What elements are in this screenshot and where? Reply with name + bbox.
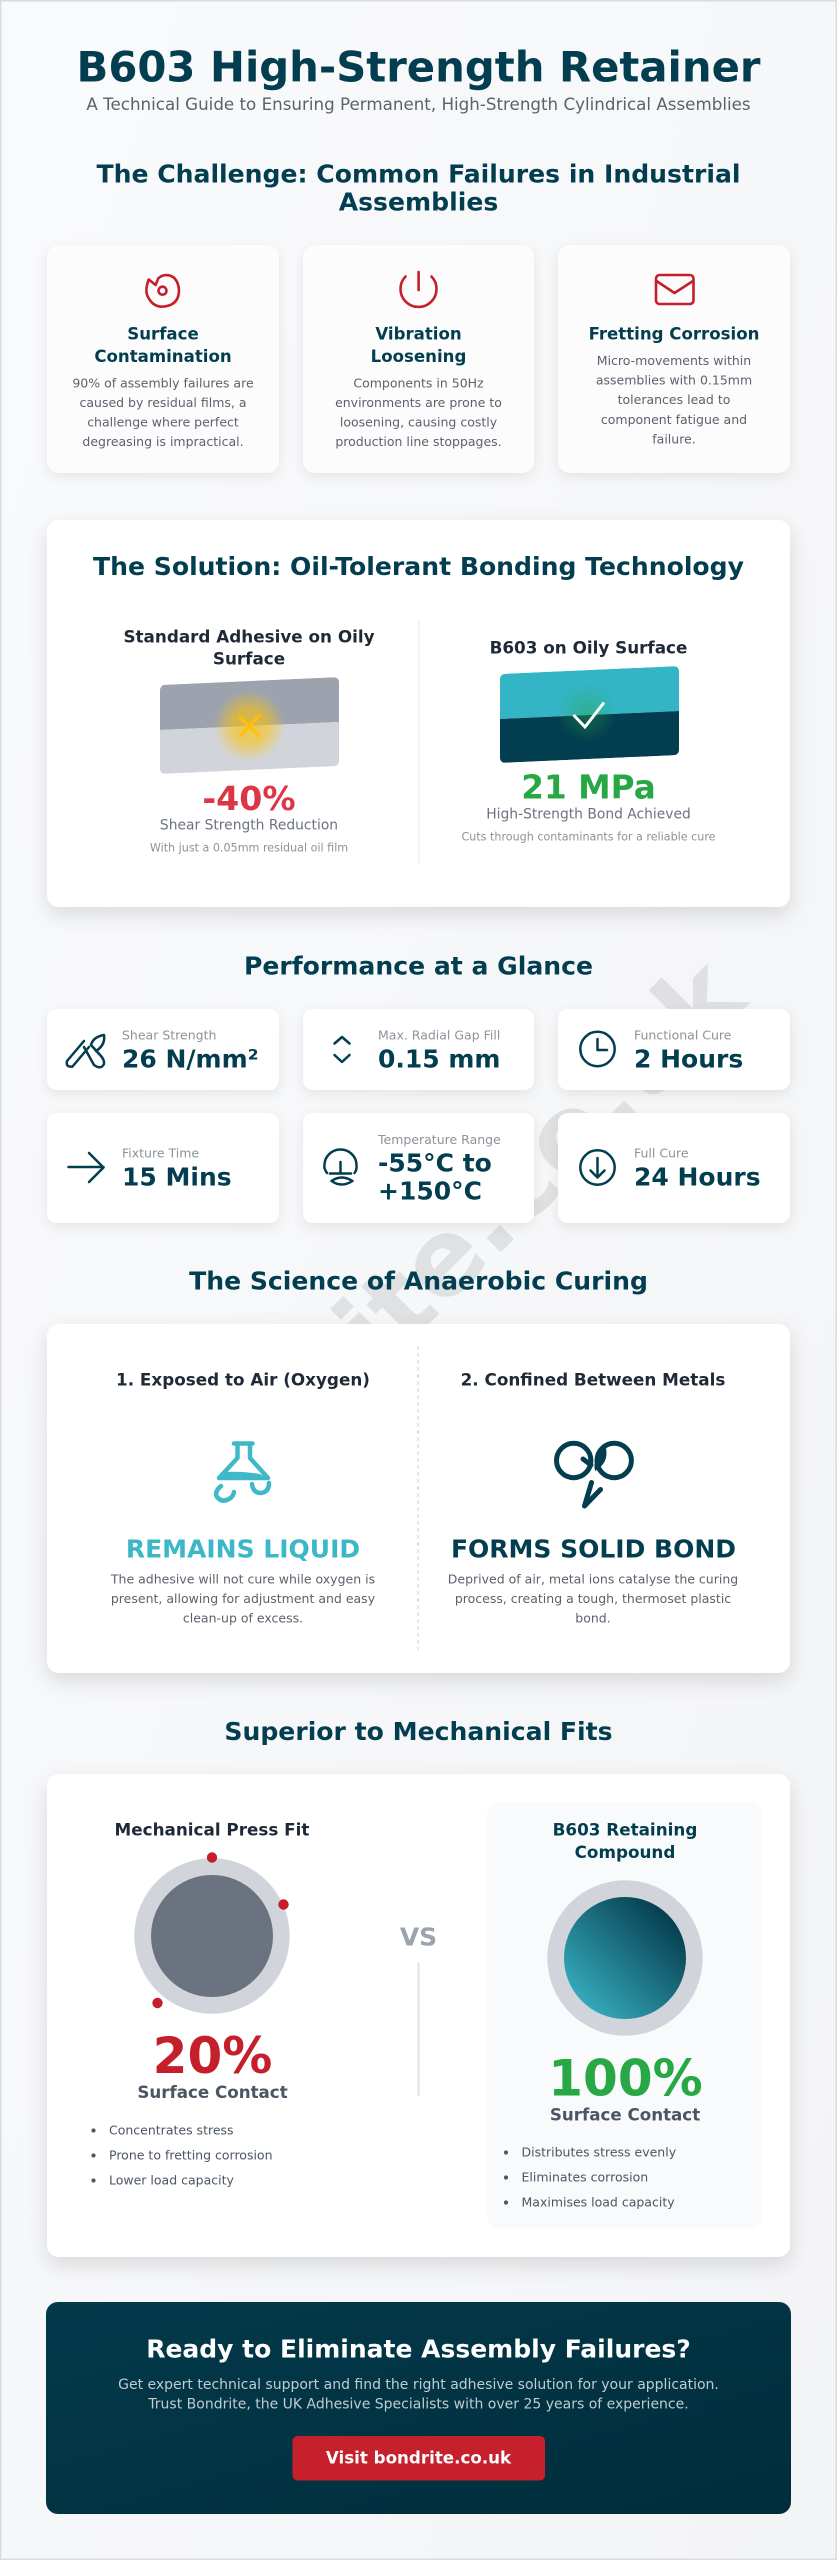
label and value (634, 1027, 743, 1073)
b603 column (487, 1802, 762, 2228)
stat card: functional cure (558, 1009, 790, 1090)
icon: clock (580, 1032, 615, 1066)
heading: the science: The Science of Anaerobic Curing (189, 1266, 648, 1295)
step text (110, 1571, 376, 1626)
stat label: Surface Contact (137, 2082, 288, 2102)
stat label: High-Strength Bond Achieved (486, 806, 691, 822)
bullet list: Maximises load capacity (522, 2195, 675, 2210)
card title: Loosening (371, 347, 466, 366)
step 2 column (448, 1369, 738, 1626)
label and value (378, 1027, 500, 1073)
stat label: Surface Contact (550, 2105, 700, 2125)
stat card: temperature range (303, 1113, 534, 1223)
bullet list (91, 2122, 273, 2188)
failed bond diagram (160, 677, 339, 774)
label and value: 15 Mins (122, 1162, 232, 1191)
step text (448, 1571, 738, 1626)
label and value: 26 N/mm² (122, 1044, 259, 1073)
column title (123, 627, 375, 668)
icon: temperature (324, 1149, 357, 1184)
label and value (122, 1146, 232, 1191)
stat: 21 MPa: 21 MPa (521, 768, 656, 806)
icon: down arrow (580, 1150, 615, 1185)
card title: Vibration (375, 324, 462, 343)
diagram: press fit circles (134, 1852, 290, 2014)
card title (371, 324, 466, 366)
card text: component fatigue and (601, 412, 747, 427)
column title (553, 1820, 697, 1862)
step 1 column (110, 1369, 376, 1626)
panel: vibration loosening (303, 245, 534, 473)
stat card: fixture time (47, 1113, 279, 1223)
call to action panel (46, 2302, 791, 2514)
label and value: 0.15 mm (378, 1044, 500, 1073)
heading: the solution: The Solution: Oil-Tolerant Bonding Technology (93, 552, 744, 581)
heading: superior: Superior to Mechanical Fits (224, 1717, 613, 1746)
stat label: Shear Strength Reduction (160, 817, 338, 833)
icon: envelope (656, 275, 694, 304)
column title: Surface (213, 648, 285, 668)
card text: loosening, causing costly (340, 415, 498, 430)
step title: 1. Exposed to Air (Oxygen) (116, 1369, 370, 1389)
diagram: b603 circles (547, 1880, 703, 2036)
column title: Compound (575, 1842, 675, 1862)
column title: B603 Retaining (553, 1820, 697, 1840)
mechanical press fit column (91, 1820, 309, 2188)
bullet list: Distributes stress evenly (522, 2144, 677, 2159)
step text: Deprived of air, metal ions catalyse the curing (448, 1571, 738, 1586)
strong bond diagram (500, 666, 679, 763)
column title: Mechanical Press Fit (115, 1820, 309, 1840)
card text: 90% of assembly failures are (72, 376, 254, 390)
card text: Components in 50Hz (353, 376, 484, 390)
label and value: Shear Strength (122, 1027, 216, 1042)
standard adhesive column (123, 627, 375, 855)
icon: flask (216, 1444, 269, 1501)
heading: the challenge: The Challenge: Common Failures in Industrial (96, 160, 740, 189)
icon: bonded rings (556, 1443, 631, 1506)
label and value: -55°C to (378, 1149, 492, 1178)
bullet list: Lower load capacity (109, 2172, 234, 2188)
heading: performance: Performance at a Glance (244, 951, 593, 980)
label and value: 24 Hours (634, 1162, 761, 1191)
title: B603 High-Strength Retainer (77, 43, 761, 92)
label and value: +150°C (378, 1176, 482, 1205)
card text: Micro-movements within (597, 353, 751, 368)
step text: present, allowing for adjustment and easy (111, 1591, 376, 1606)
heading: the challenge: Assemblies (339, 188, 498, 217)
step text: clean-up of excess. (183, 1610, 303, 1626)
cta text (118, 2377, 719, 2413)
bullet list: Prone to fretting corrosion (109, 2147, 273, 2162)
stat: 20%: 20% (153, 2027, 272, 2085)
stat card: shear strength (47, 1009, 279, 1090)
label and value: Max. Radial Gap Fill (378, 1027, 500, 1042)
b603 column (461, 637, 716, 844)
card text: environments are prone to (335, 395, 502, 410)
card text: assemblies with 0.15mm (596, 373, 752, 388)
card text: failure. (652, 431, 696, 446)
stat note: With just a 0.05mm residual oil film (150, 842, 348, 855)
label and value (122, 1027, 259, 1073)
stat: -40%: -40% (202, 779, 296, 818)
card text: challenge where perfect (87, 415, 239, 430)
stat card: full cure (558, 1113, 790, 1223)
bullet list (504, 2144, 677, 2210)
vs divider: VS (400, 1923, 437, 1952)
card text: degreasing is impractical. (82, 434, 244, 449)
card title: Fretting Corrosion (589, 324, 759, 343)
state: forms solid bond: FORMS SOLID BOND (451, 1535, 736, 1564)
label and value: Temperature Range (377, 1132, 501, 1147)
icon: power (400, 272, 436, 307)
icon: target (146, 275, 179, 307)
label and value: Functional Cure (634, 1027, 732, 1042)
card title: Surface (127, 324, 199, 343)
step text: process, creating a tough, thermoset plastic (455, 1591, 731, 1606)
button (292, 2436, 545, 2480)
subtitle: A Technical Guide to Ensuring Permanent, High-Strength Cylindrical Assemblies (86, 94, 751, 114)
card text (72, 376, 254, 449)
cta text: Get expert technical support and find the right adhesive solution for your application. (118, 2377, 719, 2393)
card title: Contamination (94, 347, 232, 366)
icon: tools (67, 1035, 104, 1067)
label and value (634, 1146, 761, 1191)
label and value: Fixture Time (122, 1146, 199, 1161)
bullet list: Concentrates stress (109, 2122, 234, 2137)
cta heading: Ready to Eliminate Assembly Failures? (146, 2334, 691, 2363)
state: remains liquid: REMAINS LIQUID (126, 1535, 360, 1564)
card text (596, 353, 752, 446)
card text: production line stoppages. (335, 434, 502, 449)
stat card: radial gap fill (303, 1009, 534, 1090)
column title: Standard Adhesive on Oily (123, 627, 375, 647)
panel: fretting corrosion (558, 245, 790, 473)
card title (94, 324, 232, 366)
heading: the challenge (96, 160, 740, 217)
panel: the solution (47, 520, 790, 907)
step text: The adhesive will not cure while oxygen is (110, 1571, 375, 1586)
card text: tolerances lead to (618, 392, 730, 407)
label and value: 2 Hours (634, 1044, 743, 1073)
step text: bond. (575, 1610, 611, 1626)
watermark: bondrite.co.uk (62, 933, 769, 1639)
header (77, 43, 761, 114)
cta text: Trust Bondrite, the UK Adhesive Specialists with over 25 years of experience. (147, 2397, 689, 2413)
panel: comparison (47, 1774, 790, 2257)
card text (335, 376, 502, 449)
stat note: Cuts through contaminants for a reliable cure (461, 831, 716, 844)
icon: arrow (68, 1153, 104, 1182)
stat: 100%: 100% (548, 2050, 703, 2108)
label and value: Full Cure (634, 1146, 689, 1161)
button: Visit bondrite.co.uk (326, 2447, 512, 2467)
label and value (377, 1132, 501, 1205)
step title: 2. Confined Between Metals (461, 1369, 725, 1389)
panel: surface contamination (47, 245, 279, 473)
icon: chevrons (334, 1037, 350, 1062)
card text: caused by residual films, a (79, 395, 247, 410)
panel: anaerobic curing (47, 1324, 790, 1673)
column title: B603 on Oily Surface (490, 637, 687, 657)
bullet list: Eliminates corrosion (522, 2170, 648, 2185)
